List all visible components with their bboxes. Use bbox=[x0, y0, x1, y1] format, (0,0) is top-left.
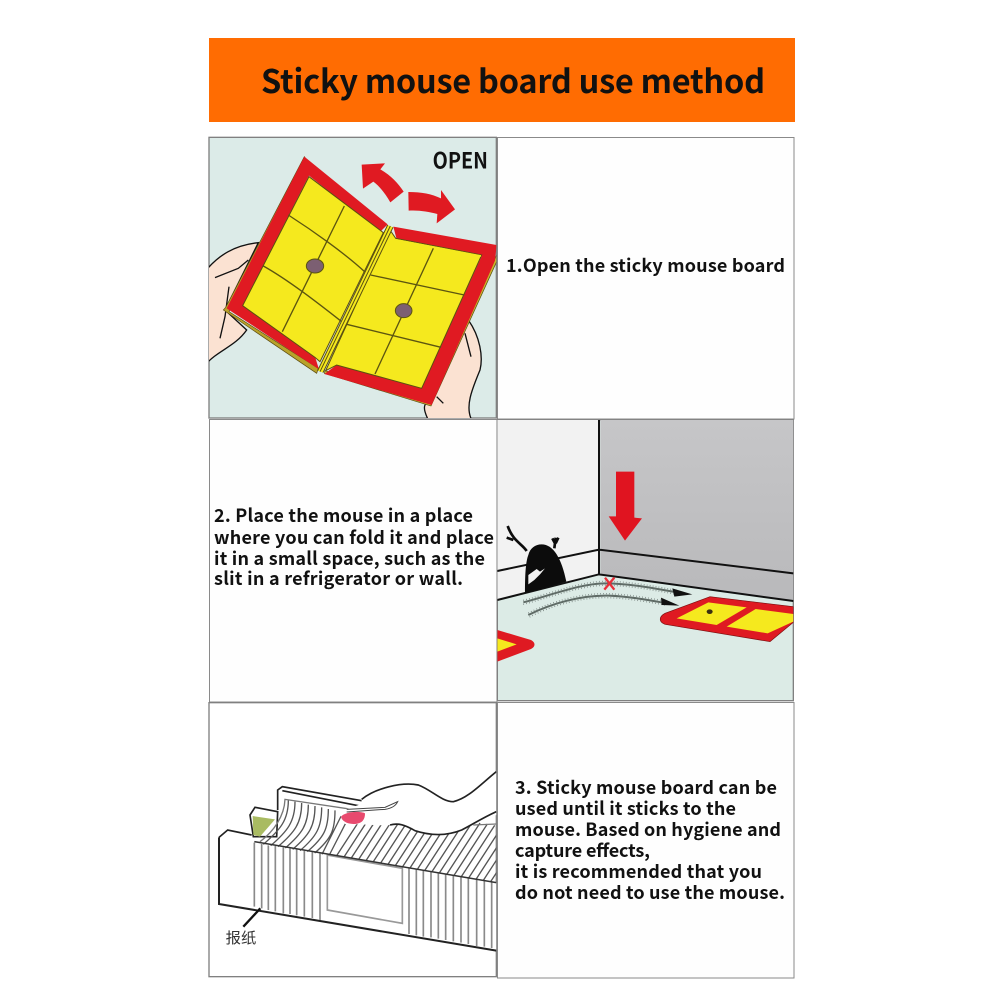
panel: step 2 text cell: slit in a refrigerator or wall. bbox=[214, 565, 463, 591]
icon: red sticky spot bbox=[341, 812, 365, 824]
label: newspaper: 报纸 bbox=[226, 927, 257, 948]
panel: step 2 text cell bbox=[210, 420, 497, 702]
panel: step 3 text cell: capture effects, bbox=[515, 837, 650, 863]
panel: step 2 text cell: it in a small space, such as the bbox=[214, 545, 485, 571]
title banner: Sticky mouse board use method bbox=[261, 56, 765, 103]
panel: step 3 text cell: mouse. Based on hygiene and bbox=[515, 816, 781, 842]
icon: hand pressing bbox=[338, 772, 496, 834]
board spine bbox=[318, 225, 393, 373]
panel: step 1 text cell bbox=[498, 138, 794, 419]
panel: step 3 illustration, folded board bbox=[209, 703, 524, 977]
arrow: down red bbox=[609, 472, 642, 541]
board: right trap bbox=[660, 597, 793, 642]
gray fold outline bbox=[260, 798, 349, 842]
skirting lines bbox=[497, 420, 793, 601]
panel: step 3 text cell: 3. Sticky mouse board can be bbox=[515, 774, 777, 800]
board: right page bbox=[324, 227, 497, 406]
icon: left hand bbox=[205, 243, 258, 365]
panel: step 2 text cell: 2. Place the mouse in a place bbox=[214, 502, 473, 528]
top fold of board bbox=[278, 787, 377, 810]
board: left trap bbox=[497, 630, 534, 662]
board top surface straight stripes bbox=[336, 822, 496, 882]
newspaper window bbox=[327, 855, 402, 923]
label: OPEN: OPEN bbox=[433, 144, 488, 176]
arrow: left curved bbox=[362, 163, 404, 202]
leader line bbox=[243, 908, 260, 927]
arrow: right curved bbox=[408, 190, 455, 223]
hand outline bbox=[362, 772, 496, 834]
route arrow: lower bbox=[528, 594, 679, 617]
right gray strip bbox=[473, 824, 496, 825]
board back flap, green bbox=[250, 807, 278, 837]
board: front face bbox=[496, 882, 497, 950]
icon: red cross bbox=[604, 578, 614, 590]
board top surface curved stripes bbox=[263, 800, 349, 855]
finger and nail bbox=[347, 802, 398, 812]
route arrow: upper bbox=[523, 581, 692, 604]
panel: step 1 illustration, opening the board bbox=[205, 137, 497, 420]
board top edge line bbox=[254, 842, 496, 883]
icon: mouse hole with mouse bbox=[507, 526, 566, 593]
panel: step 3 text cell: used until it sticks to the bbox=[515, 795, 736, 821]
panel: step 3 text cell: it is recommended that you bbox=[515, 858, 762, 884]
board: left page bbox=[223, 157, 388, 373]
newspaper vertical stripes bbox=[254, 843, 492, 948]
title banner bbox=[209, 38, 795, 122]
finger lines bbox=[215, 260, 471, 403]
panel: step 2 illustration, placing along the wall bbox=[497, 420, 793, 701]
panel: step 3 text cell: do not need to use the mouse. bbox=[515, 879, 785, 905]
panel: step 2 text cell: where you can fold it and place bbox=[214, 524, 494, 550]
right wall bbox=[600, 420, 793, 601]
panel: step 1 text cell: 1.Open the sticky mouse board bbox=[506, 252, 785, 278]
left wall bbox=[497, 420, 599, 600]
icon: right hand bbox=[424, 320, 481, 420]
panel: step 3 text cell bbox=[498, 702, 794, 978]
